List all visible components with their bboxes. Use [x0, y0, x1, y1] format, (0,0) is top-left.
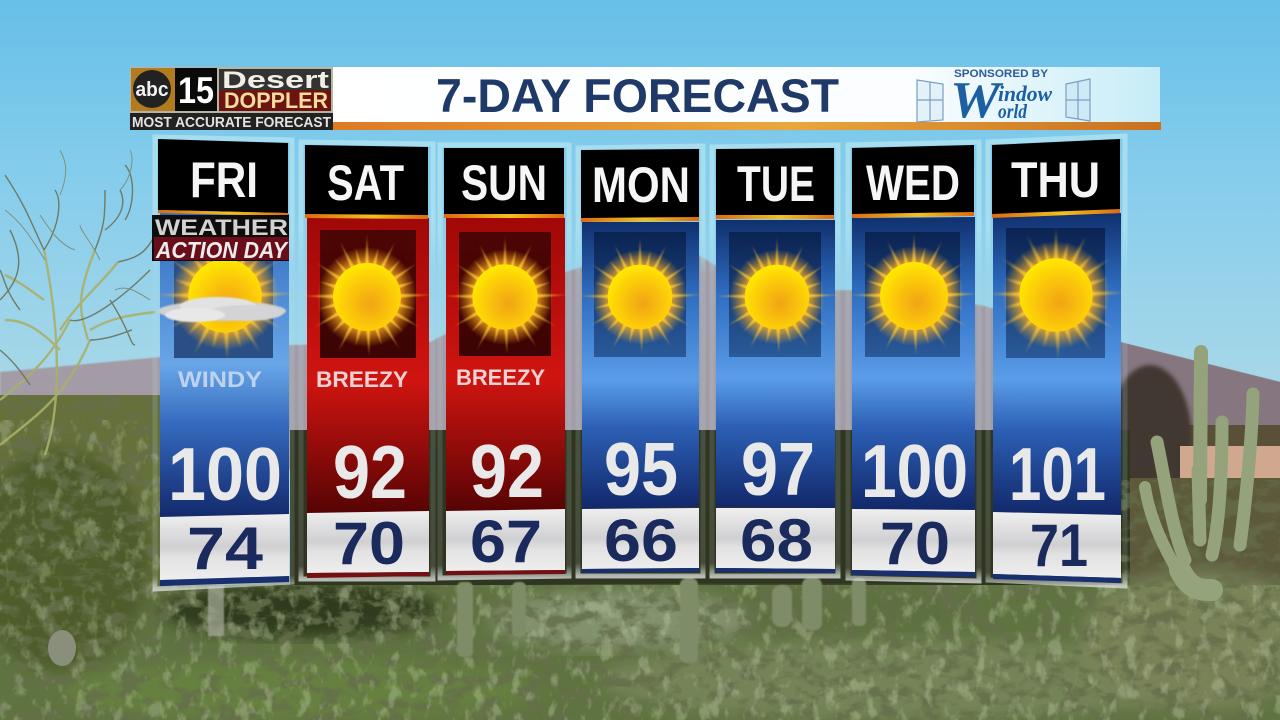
day label — [852, 145, 974, 215]
panel: THU: THU — [1011, 152, 1100, 208]
title banner — [333, 67, 1160, 122]
high temperature: 100 — [168, 432, 282, 516]
day label — [305, 145, 428, 216]
station logo: Desert — [222, 67, 329, 94]
condition: BREEZY — [316, 367, 408, 392]
weather action day badge: WEATHER — [155, 215, 288, 240]
panel: TUE — [712, 148, 844, 574]
panel: THU — [983, 139, 1132, 583]
day label — [716, 148, 834, 216]
panel: FRI: FRI — [190, 152, 258, 208]
panel: TUE: TUE — [737, 156, 815, 212]
icon: sun — [712, 236, 844, 354]
left tree branches — [0, 150, 155, 455]
panel: WED: WED — [866, 155, 960, 211]
high temperature: 92 — [333, 430, 407, 514]
low temperature — [993, 512, 1121, 583]
day label — [444, 148, 564, 215]
icon: sun — [440, 236, 572, 355]
station logo — [130, 67, 333, 131]
sponsor: Window World — [917, 68, 1090, 129]
low temperature — [307, 510, 429, 578]
sponsor: Window World: W — [950, 72, 1004, 129]
panel: SUN: SUN — [461, 155, 547, 211]
icon: sun — [299, 233, 437, 357]
low temperature: 66 — [604, 507, 678, 574]
panel: SAT — [299, 145, 437, 578]
sponsor: Window World: SPONSORED BY — [954, 68, 1049, 80]
low temperature — [446, 508, 565, 575]
low temperature: 70 — [333, 510, 405, 577]
low temperature: 71 — [1030, 512, 1088, 579]
sponsor: Window World: orld — [998, 101, 1028, 123]
station logo: MOST ACCURATE FORECAST — [132, 114, 331, 131]
day label — [158, 139, 288, 213]
low temperature: 74 — [187, 515, 264, 582]
header bar — [130, 67, 1161, 131]
sponsor: Window World: indow — [998, 81, 1052, 106]
high temperature: 95 — [604, 427, 678, 511]
weather action day badge — [152, 215, 289, 263]
low temperature — [160, 514, 289, 586]
low temperature — [582, 507, 699, 574]
day label — [992, 139, 1120, 215]
weather action day badge: ACTION DAY — [155, 237, 289, 263]
panel: MON — [575, 149, 707, 574]
saguaro cactus group — [1145, 352, 1253, 590]
low temperature: 70 — [880, 510, 950, 577]
low temperature — [716, 507, 835, 574]
high temperature: 97 — [741, 427, 815, 511]
icon: sun — [983, 226, 1132, 360]
low temperature: 68 — [740, 507, 813, 574]
panel: SAT: SAT — [327, 155, 404, 211]
high temperature: 100 — [861, 429, 968, 513]
station logo: 15 — [178, 70, 214, 111]
icon: cloud — [158, 297, 286, 322]
day label — [581, 149, 699, 219]
station logo: abc — [136, 79, 168, 101]
mountains — [0, 250, 1280, 470]
condition: BREEZY — [456, 365, 545, 390]
title: 7-DAY FORECAST — [436, 69, 839, 122]
panel: FRI — [152, 139, 301, 586]
foreground cacti and ocotillo — [48, 578, 866, 666]
icon: sun behind cloud — [152, 227, 301, 361]
high temperature: 101 — [1009, 432, 1106, 516]
icon: sun — [846, 232, 984, 356]
condition: WINDY — [178, 367, 262, 392]
station logo: DOPPLER — [224, 88, 328, 113]
glass panel frames — [155, 136, 1125, 589]
low temperature: 67 — [470, 508, 542, 575]
high temperature: 92 — [470, 429, 544, 513]
panel: SUN — [440, 148, 572, 575]
panel: WED — [846, 145, 984, 577]
orange strip — [333, 122, 1161, 130]
low temperature — [852, 509, 975, 577]
desert brush ground — [0, 365, 1280, 720]
icon: sun — [575, 236, 707, 354]
panel: MON: MON — [592, 157, 690, 213]
